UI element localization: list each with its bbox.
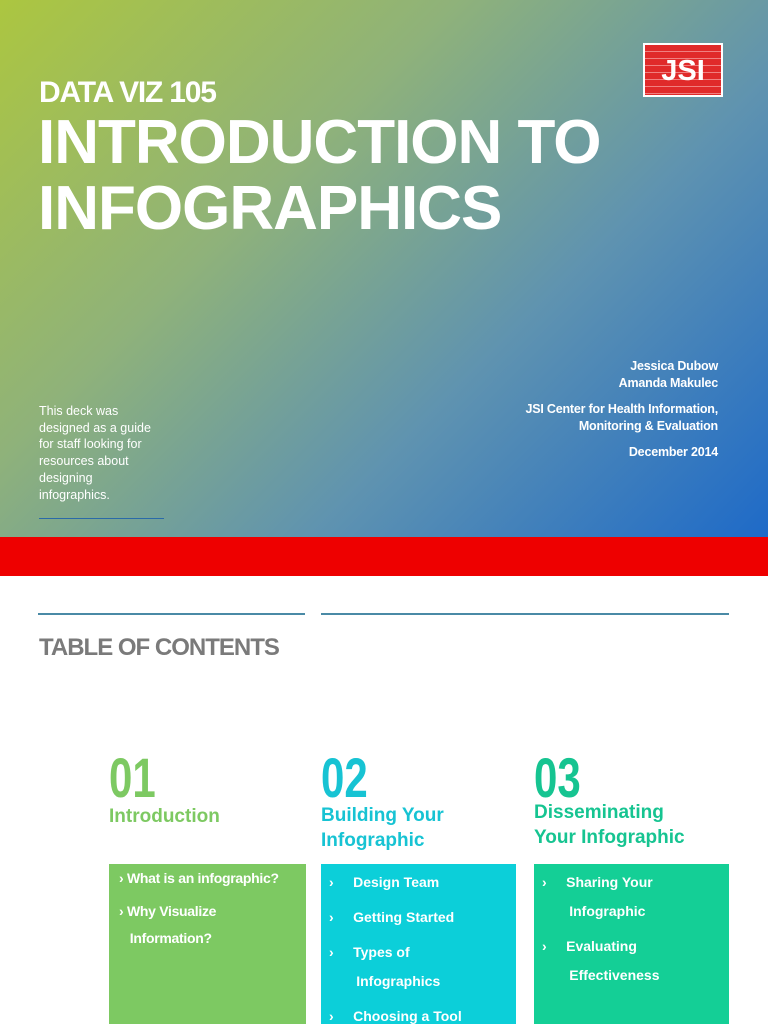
title: INFOGRAPHICS — [38, 174, 501, 243]
number 03: 03 — [534, 746, 581, 809]
title — [38, 108, 600, 243]
title: INTRODUCTION TO — [38, 108, 600, 177]
box 02: › Design Team › Getting Started › Types of — [329, 874, 454, 960]
box 01: Information? — [130, 930, 212, 946]
red band — [0, 537, 768, 576]
box 03: Effectiveness — [569, 967, 660, 983]
number 02: 02 — [321, 746, 368, 809]
description text: This deck was designed as a guide for staff looking for resources about designing infographics. — [39, 404, 151, 502]
authors block: December 2014 — [629, 445, 718, 459]
authors block: JSI Center for Health Information, — [525, 402, 718, 416]
authors block — [525, 359, 718, 459]
subtitle: DATA VIZ 105 — [39, 76, 216, 109]
authors block: Monitoring & Evaluation — [579, 419, 718, 433]
heading building: Building Your — [321, 805, 444, 826]
box 03: Infographic › Evaluating — [542, 903, 645, 954]
authors block: Amanda Makulec — [619, 376, 718, 390]
heading building: Infographic — [321, 830, 424, 851]
box 03 — [534, 864, 729, 1024]
header panel — [0, 0, 768, 537]
logo: JSI: JSI — [661, 55, 705, 87]
column 03 — [534, 746, 729, 1024]
heading building — [321, 805, 444, 851]
heading disseminating — [534, 802, 685, 848]
logo: JSI — [643, 43, 723, 97]
box 02 — [321, 864, 516, 1024]
column 01 — [109, 746, 306, 1024]
heading disseminating: Disseminating — [534, 802, 664, 823]
column 02 — [321, 746, 516, 1024]
authors block: Jessica Dubow — [630, 359, 718, 373]
box 01 — [109, 864, 306, 1024]
heading introduction: Introduction — [109, 806, 220, 827]
number 01: 01 — [109, 746, 156, 809]
box 01: › Why Visualize — [119, 903, 216, 919]
box 01: › What is an infographic? — [119, 870, 279, 886]
box 02: Infographics › Choosing a Tool — [329, 973, 462, 1024]
heading disseminating: Your Infographic — [534, 827, 685, 848]
heading: table of contents: TABLE OF CONTENTS — [39, 634, 279, 661]
box 03: › Sharing Your — [542, 874, 653, 890]
